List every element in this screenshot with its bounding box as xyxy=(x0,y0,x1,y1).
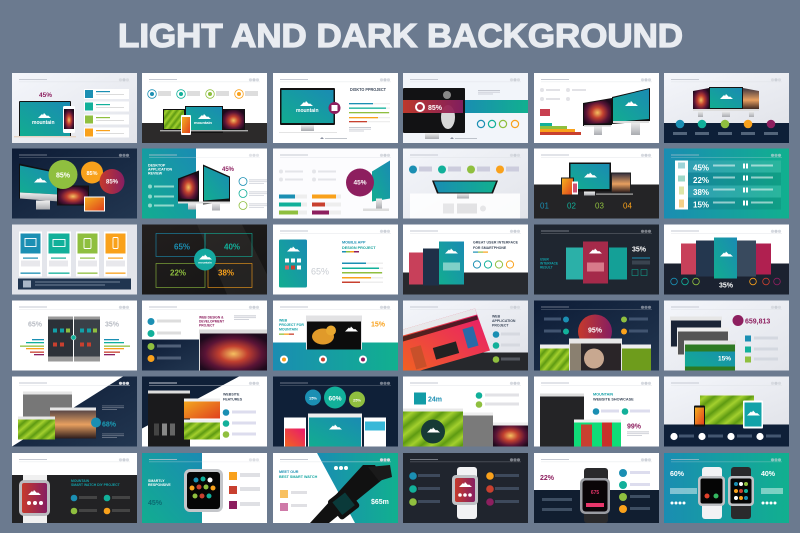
teal band xyxy=(463,100,528,113)
slide: laptop mockup with features xyxy=(12,73,137,143)
feature circles xyxy=(493,331,520,363)
slide: dark percentages: 40% xyxy=(224,242,240,252)
circle blue: 15% xyxy=(309,396,317,400)
heading: DESKTOP xyxy=(148,164,166,168)
heading: WEB DESIGN & xyxy=(199,316,224,320)
slide: great user interface xyxy=(403,224,528,294)
slide: smartly responsive xyxy=(142,453,267,523)
feature circles xyxy=(670,433,781,440)
icon xyxy=(414,392,426,404)
heading: RESPONSIVE xyxy=(148,483,171,487)
slide: responsive device user data xyxy=(664,148,789,218)
slide: desktop application review xyxy=(142,148,267,218)
tablet xyxy=(743,400,763,428)
slide: 95% red circle xyxy=(534,300,659,370)
monitor with chess photo xyxy=(403,88,465,139)
slide: device mockup with circles xyxy=(12,148,137,218)
slide: dark percentages: 38% xyxy=(218,268,234,278)
cards xyxy=(19,232,127,276)
browser xyxy=(199,330,267,370)
colorful site xyxy=(574,420,621,446)
stat: 659,813 xyxy=(745,318,770,326)
slide: three browsers with circles xyxy=(273,376,398,446)
laptop: mountain xyxy=(32,120,54,126)
slide: top view desktop xyxy=(403,148,528,218)
slide: green site devices xyxy=(664,376,789,446)
circle green: 85% xyxy=(56,172,71,180)
heading: GREAT USER INTERFACE xyxy=(473,240,519,244)
slide: best smart watch xyxy=(273,453,398,523)
percent left: 60% xyxy=(670,471,685,478)
slide: side monitor bars xyxy=(273,148,398,218)
feature circles xyxy=(148,90,258,98)
badge xyxy=(328,102,340,114)
heading: PROJECT xyxy=(492,324,509,328)
heading: SMARTLY xyxy=(148,479,165,483)
watch: 675 xyxy=(591,490,599,496)
feature circles xyxy=(619,469,650,513)
slide: chess piece 85% xyxy=(403,73,528,143)
bar chart xyxy=(540,123,581,135)
numbers xyxy=(540,202,632,210)
tilted browser xyxy=(403,308,490,376)
monitor xyxy=(363,160,390,211)
monitors xyxy=(178,164,230,210)
percent callout: 45% xyxy=(39,92,52,99)
monitor xyxy=(432,180,498,194)
slide: dark percentages: 22% xyxy=(170,268,186,278)
circles xyxy=(593,408,650,415)
browser xyxy=(306,316,362,350)
panel xyxy=(410,194,520,218)
heading: MOUNTAIN xyxy=(279,328,298,332)
monitor: mountain xyxy=(296,108,318,114)
slide: dark percentages xyxy=(142,224,267,294)
phones xyxy=(409,242,464,286)
phones xyxy=(48,316,100,362)
heading: DESIGN PROJECT xyxy=(342,246,376,250)
bars xyxy=(342,262,383,283)
heading xyxy=(148,479,171,487)
bars right xyxy=(104,339,130,355)
slide: web application project xyxy=(403,300,528,370)
circle green: 25% xyxy=(353,398,361,402)
slide: mobile app design xyxy=(273,224,398,294)
red circle: 95% xyxy=(588,328,603,334)
monitors xyxy=(583,88,650,135)
numbers: 03 xyxy=(595,202,604,210)
heading xyxy=(148,164,172,176)
black watch xyxy=(728,467,754,519)
bars xyxy=(349,103,390,122)
heading: MEET OUR xyxy=(279,470,299,474)
heading: WEBSITE SHOWCASE xyxy=(593,398,634,402)
slide: double screen xyxy=(534,73,659,143)
heading xyxy=(223,392,243,402)
phone xyxy=(63,106,75,133)
red band: 85% xyxy=(428,105,443,112)
tablet and phone xyxy=(561,178,578,196)
slide: three monitors xyxy=(664,73,789,143)
heading: FOR SMARTPHONE xyxy=(473,246,507,250)
heading xyxy=(540,258,558,270)
percent left: 65% xyxy=(28,322,43,328)
heading xyxy=(71,479,121,487)
laptop xyxy=(596,172,633,195)
watch xyxy=(184,469,223,512)
slide: web project xyxy=(273,300,398,370)
slide: web design and development xyxy=(142,300,267,370)
heading: DEVELOPMENT xyxy=(199,320,224,324)
slide: diagonal 68% xyxy=(12,376,137,446)
hexagon icons right xyxy=(486,472,519,506)
numbers: 01 xyxy=(540,202,549,210)
hexagon icons left xyxy=(409,472,440,506)
details xyxy=(713,164,773,204)
black watch xyxy=(310,465,392,523)
percent: 35% xyxy=(632,246,647,254)
heading: MOBILE APP xyxy=(342,240,366,244)
feature circles xyxy=(223,409,256,438)
browsers xyxy=(403,408,528,446)
icon xyxy=(91,418,101,428)
monitor xyxy=(569,162,611,196)
items xyxy=(476,392,519,408)
heading: BEST SMART WATCH xyxy=(279,475,318,479)
browsers xyxy=(284,414,386,446)
percent: 15% xyxy=(371,322,386,328)
slide: website showcase xyxy=(534,376,659,446)
numbers: 04 xyxy=(623,202,632,210)
slide: four device cards xyxy=(12,224,137,294)
small circles xyxy=(334,466,348,470)
heading: PROJECT FOR xyxy=(279,323,304,327)
dark site xyxy=(540,394,584,446)
circle teal: 60% xyxy=(328,396,342,402)
laptop xyxy=(57,186,89,206)
stat: 24m xyxy=(428,396,442,404)
heading xyxy=(279,470,318,479)
circles xyxy=(239,178,247,210)
circles xyxy=(671,278,780,285)
slide: smart watch project xyxy=(12,453,137,523)
device icons xyxy=(25,238,118,248)
feature circles xyxy=(544,316,648,334)
phone xyxy=(694,406,705,426)
circles xyxy=(477,120,519,128)
bars left xyxy=(20,339,44,355)
slide: watch comparison xyxy=(664,453,789,523)
slide: white watch features xyxy=(403,453,528,523)
text items xyxy=(279,170,336,182)
percentages: 65% xyxy=(174,242,190,252)
dots xyxy=(670,502,776,504)
percent: 45% xyxy=(222,167,235,173)
content rows xyxy=(745,336,778,362)
icons xyxy=(280,490,307,511)
heading: INTERFACE xyxy=(540,262,558,266)
phone xyxy=(279,240,307,288)
five circles xyxy=(676,120,775,128)
heading: DISKTO PPROJECT xyxy=(350,87,386,92)
content rows xyxy=(229,472,260,509)
lines xyxy=(670,488,783,494)
slide: user interface result xyxy=(534,224,659,294)
heading: WEB xyxy=(279,318,288,322)
center logo: mountain xyxy=(198,260,212,264)
feature circles xyxy=(280,356,367,364)
phone xyxy=(181,115,191,135)
browsers xyxy=(184,398,220,440)
phones xyxy=(566,242,627,284)
feature circles xyxy=(148,318,181,362)
percentages: 15% xyxy=(693,200,709,210)
browsers: 15% xyxy=(718,356,731,362)
frames xyxy=(156,234,252,288)
browser xyxy=(700,394,754,424)
monitor xyxy=(19,164,60,210)
phones xyxy=(681,238,771,278)
colour strip xyxy=(279,334,294,335)
monitors xyxy=(693,87,759,117)
heading: WEBSITE xyxy=(223,392,240,396)
tablet xyxy=(84,196,105,212)
percentages: 22% xyxy=(693,176,709,185)
heading: REVIEW xyxy=(148,172,163,176)
feature list xyxy=(84,89,129,138)
percent: 65% xyxy=(311,266,329,276)
watch xyxy=(452,467,478,519)
dark site xyxy=(148,390,190,446)
colour strip xyxy=(342,251,359,252)
text rows xyxy=(540,88,586,101)
white column xyxy=(675,160,688,210)
laptops: mountain xyxy=(194,120,213,125)
footer bar xyxy=(18,278,131,290)
percentages: 45% xyxy=(693,164,709,172)
bars xyxy=(279,194,341,214)
percentages: 38% xyxy=(693,188,709,197)
heading: FEATURES xyxy=(223,398,243,402)
heading: PROJECT xyxy=(199,324,215,328)
price: $65m xyxy=(371,499,389,506)
percent: 22% xyxy=(540,475,555,482)
slide: website features xyxy=(142,376,267,446)
numbers: 02 xyxy=(567,202,576,210)
white watch xyxy=(698,467,725,519)
heading xyxy=(492,314,516,328)
slide: all device mockup xyxy=(534,148,659,218)
feature circles xyxy=(409,166,519,174)
heading: RESULT xyxy=(540,266,553,270)
percent right: 40% xyxy=(761,471,776,478)
heading xyxy=(593,392,634,402)
heading xyxy=(342,240,376,250)
circle red: 85% xyxy=(106,180,119,186)
slide: desktop project xyxy=(273,73,398,143)
text left xyxy=(542,498,572,511)
heading: MOUNTAIN xyxy=(71,479,90,483)
heading: APPLICATION xyxy=(148,168,172,172)
title: LIGHT AND DARK BACKGROUND xyxy=(118,18,683,55)
slide: 659,813 xyxy=(664,300,789,370)
percent: 68% xyxy=(102,422,117,428)
heading: SMART WATCH DIY PROJECT xyxy=(71,483,121,487)
percent: 45% xyxy=(148,500,163,507)
heading xyxy=(473,240,519,250)
heading: USER xyxy=(540,258,550,262)
slide: five phones 35% xyxy=(664,224,789,294)
slide: 24m stat xyxy=(403,376,528,446)
slide: laptops and phone xyxy=(142,73,267,143)
navy panel xyxy=(142,340,199,370)
browsers xyxy=(18,392,96,440)
watch xyxy=(19,475,50,523)
circles xyxy=(473,261,514,268)
percent: 35% xyxy=(719,282,734,290)
heading xyxy=(199,316,224,328)
feature circles xyxy=(71,495,130,514)
heading: MOUNTAIN xyxy=(593,392,613,396)
percentages xyxy=(693,164,709,210)
heading: WEB xyxy=(492,314,501,318)
card text xyxy=(20,258,126,274)
heading: APPLICATION xyxy=(492,319,516,323)
icon xyxy=(540,109,550,116)
side photos xyxy=(540,344,651,370)
percent: 99% xyxy=(627,424,642,430)
heading xyxy=(279,318,304,332)
rows xyxy=(688,160,781,198)
details xyxy=(632,258,650,276)
child photo xyxy=(569,338,622,370)
slide: black watch 22% xyxy=(534,453,659,523)
colour strip xyxy=(473,252,488,253)
circle orange: 85% xyxy=(86,171,98,177)
left list xyxy=(148,184,174,208)
slide: app comparison xyxy=(12,300,137,370)
card colour blocks xyxy=(20,234,126,254)
percent right: 35% xyxy=(105,322,120,328)
circle: 45% xyxy=(353,180,367,186)
